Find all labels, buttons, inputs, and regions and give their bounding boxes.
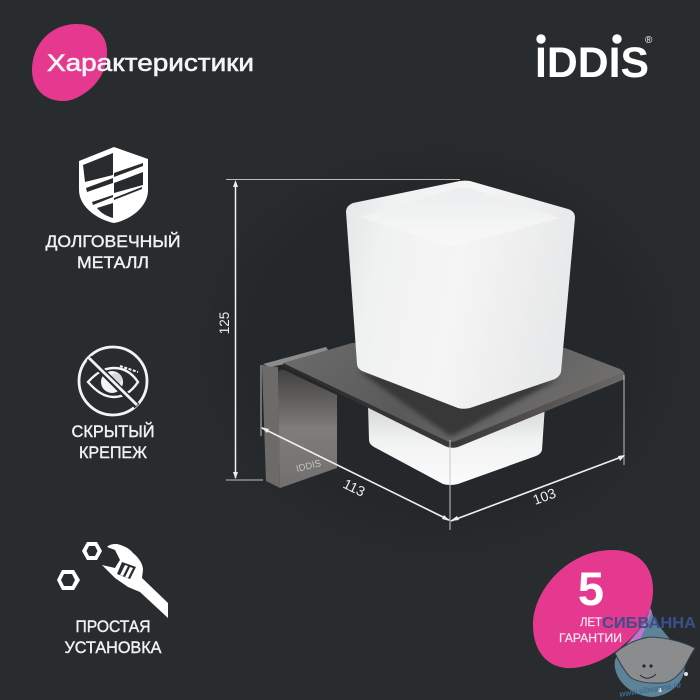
dimension: depth 113: 113 [341, 475, 368, 500]
watermark url: www.sibvanna.ru [619, 679, 682, 699]
label: скрытый крепеж: СКРЫТЫЙ [72, 422, 154, 441]
glass shadow on plate [357, 370, 561, 436]
tub feet [658, 672, 688, 692]
plate front edge [283, 363, 625, 448]
watermark name: СИБВАННА [602, 615, 696, 632]
drop overlap on badge [617, 608, 652, 653]
label: долговечный металл [46, 232, 180, 272]
product: glass holder photo [262, 181, 625, 488]
label: простая установка: УСТАНОВКА [64, 638, 162, 657]
pink blob [533, 550, 653, 668]
heading: Характеристики [32, 24, 254, 101]
bathtub [615, 637, 695, 683]
label: простая установка: ПРОСТАЯ [76, 617, 150, 636]
wall bracket front [278, 370, 337, 488]
bracket logo: IDDIS [295, 458, 322, 475]
shelf plate [283, 343, 624, 447]
number 5: 5 [578, 562, 604, 615]
watermark: sibvanna [602, 608, 696, 699]
dimensions [217, 180, 625, 530]
icon: wrench and nuts [57, 542, 168, 618]
dimension: height 125: 125 [217, 312, 232, 334]
logo: IDDIS [535, 34, 653, 87]
feature: durable metal [46, 147, 180, 272]
glass inner rim [360, 188, 560, 246]
label: гарантии: ГАРАНТИИ [559, 631, 622, 645]
pink blob behind heading [32, 24, 107, 101]
label: скрытый крепеж: КРЕПЕЖ [79, 443, 147, 462]
logo dots [536, 34, 622, 44]
icon: crossed-out eye [79, 347, 147, 415]
lower part of glass [368, 405, 545, 485]
dimension: depth 113 [261, 365, 450, 521]
feature: hidden fastening [72, 347, 154, 462]
bracket top edge [263, 347, 328, 367]
dimension: width 103: 103 [531, 485, 558, 508]
logo wordmark: IDDIS [535, 39, 649, 87]
icon: shield [79, 147, 148, 223]
dimension: width 103 [450, 375, 625, 530]
glass [346, 181, 575, 409]
feature: easy installation [57, 542, 168, 657]
registered mark: ® [645, 35, 653, 46]
wall bracket side [262, 365, 280, 488]
label: простая установка [64, 617, 162, 657]
dimension: height 125 [217, 180, 460, 480]
label: лет: ЛЕТ [580, 615, 603, 629]
label: долговечный металл: ДОЛГОВЕЧНЫЙ [46, 232, 180, 251]
label: скрытый крепеж [72, 422, 154, 462]
label: долговечный металл: МЕТАЛЛ [77, 253, 149, 272]
warranty badge [533, 550, 653, 668]
water drop [615, 608, 685, 697]
heading text: Характеристики [47, 50, 254, 77]
tub face [640, 664, 656, 678]
